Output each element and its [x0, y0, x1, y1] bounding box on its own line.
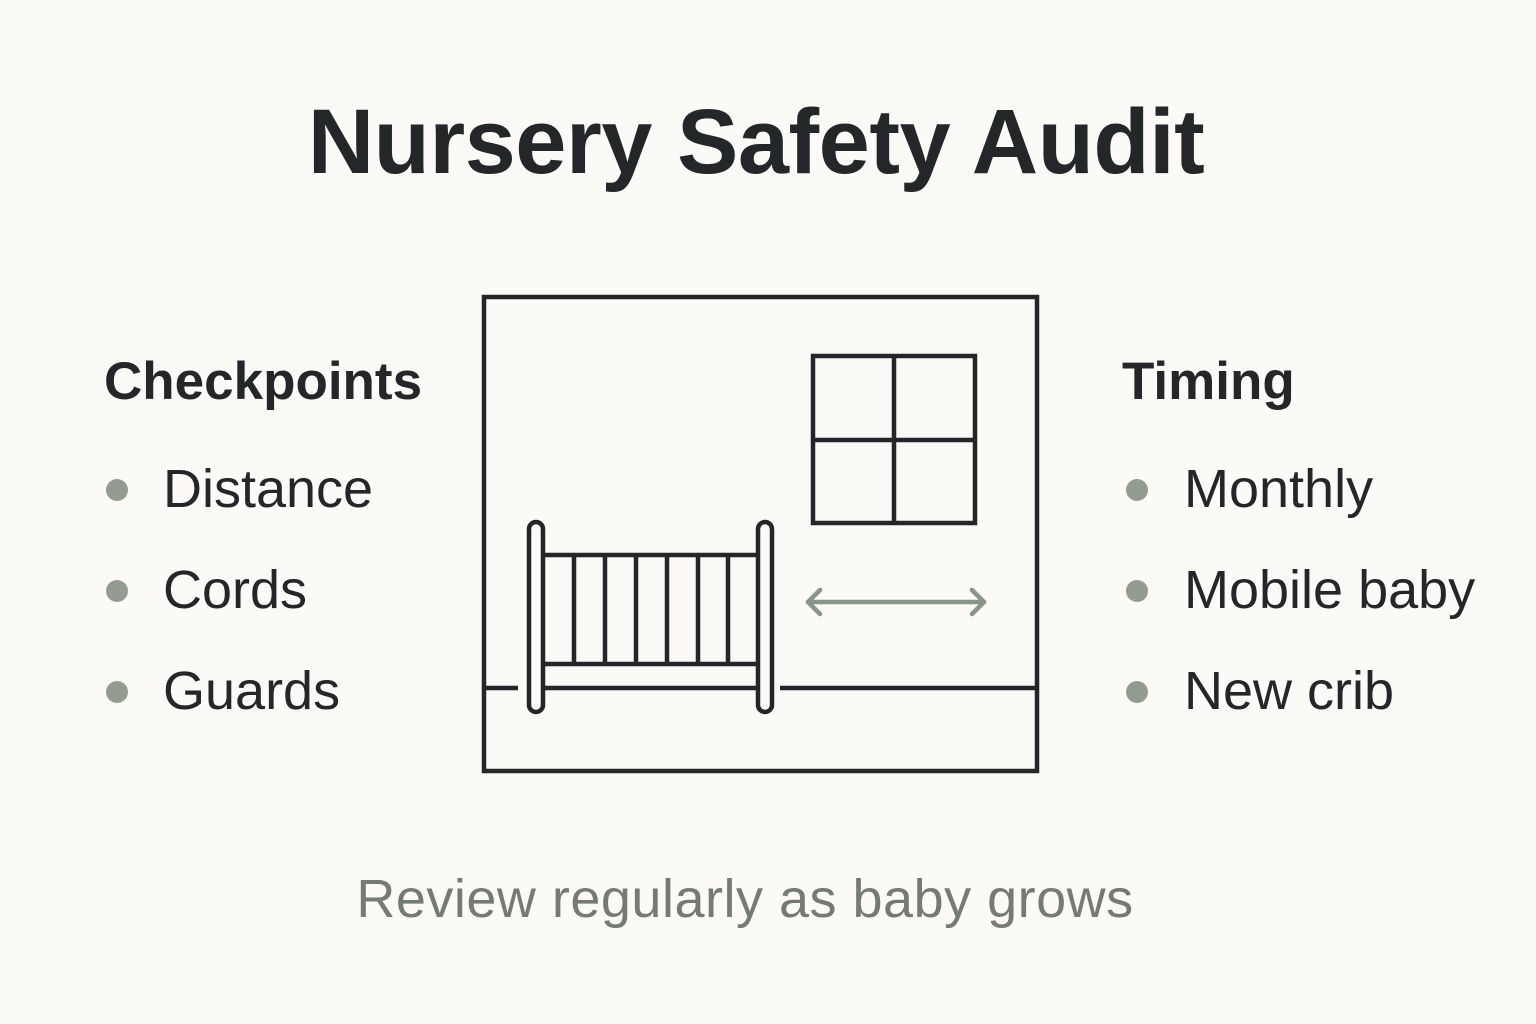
icon: crib — [529, 522, 772, 712]
window — [813, 356, 975, 523]
item: monthly: Monthly — [1184, 459, 1373, 519]
heading: checkpoints: Checkpoints — [104, 352, 422, 411]
panel: checkpoints — [104, 352, 422, 721]
title: Nursery Safety Audit — [308, 91, 1204, 193]
room frame — [484, 297, 1037, 771]
floor line — [486, 686, 1035, 690]
panel: timing — [1122, 352, 1475, 721]
item: cords: Cords — [163, 560, 307, 620]
heading: timing: Timing — [1122, 352, 1295, 411]
arrow: distance — [808, 590, 984, 614]
item: mobile baby: Mobile baby — [1184, 560, 1475, 620]
item: distance: Distance — [163, 459, 373, 519]
item: guards: Guards — [163, 661, 340, 721]
item: new crib: New crib — [1184, 661, 1394, 721]
footer note: Review regularly as baby grows — [356, 869, 1134, 929]
